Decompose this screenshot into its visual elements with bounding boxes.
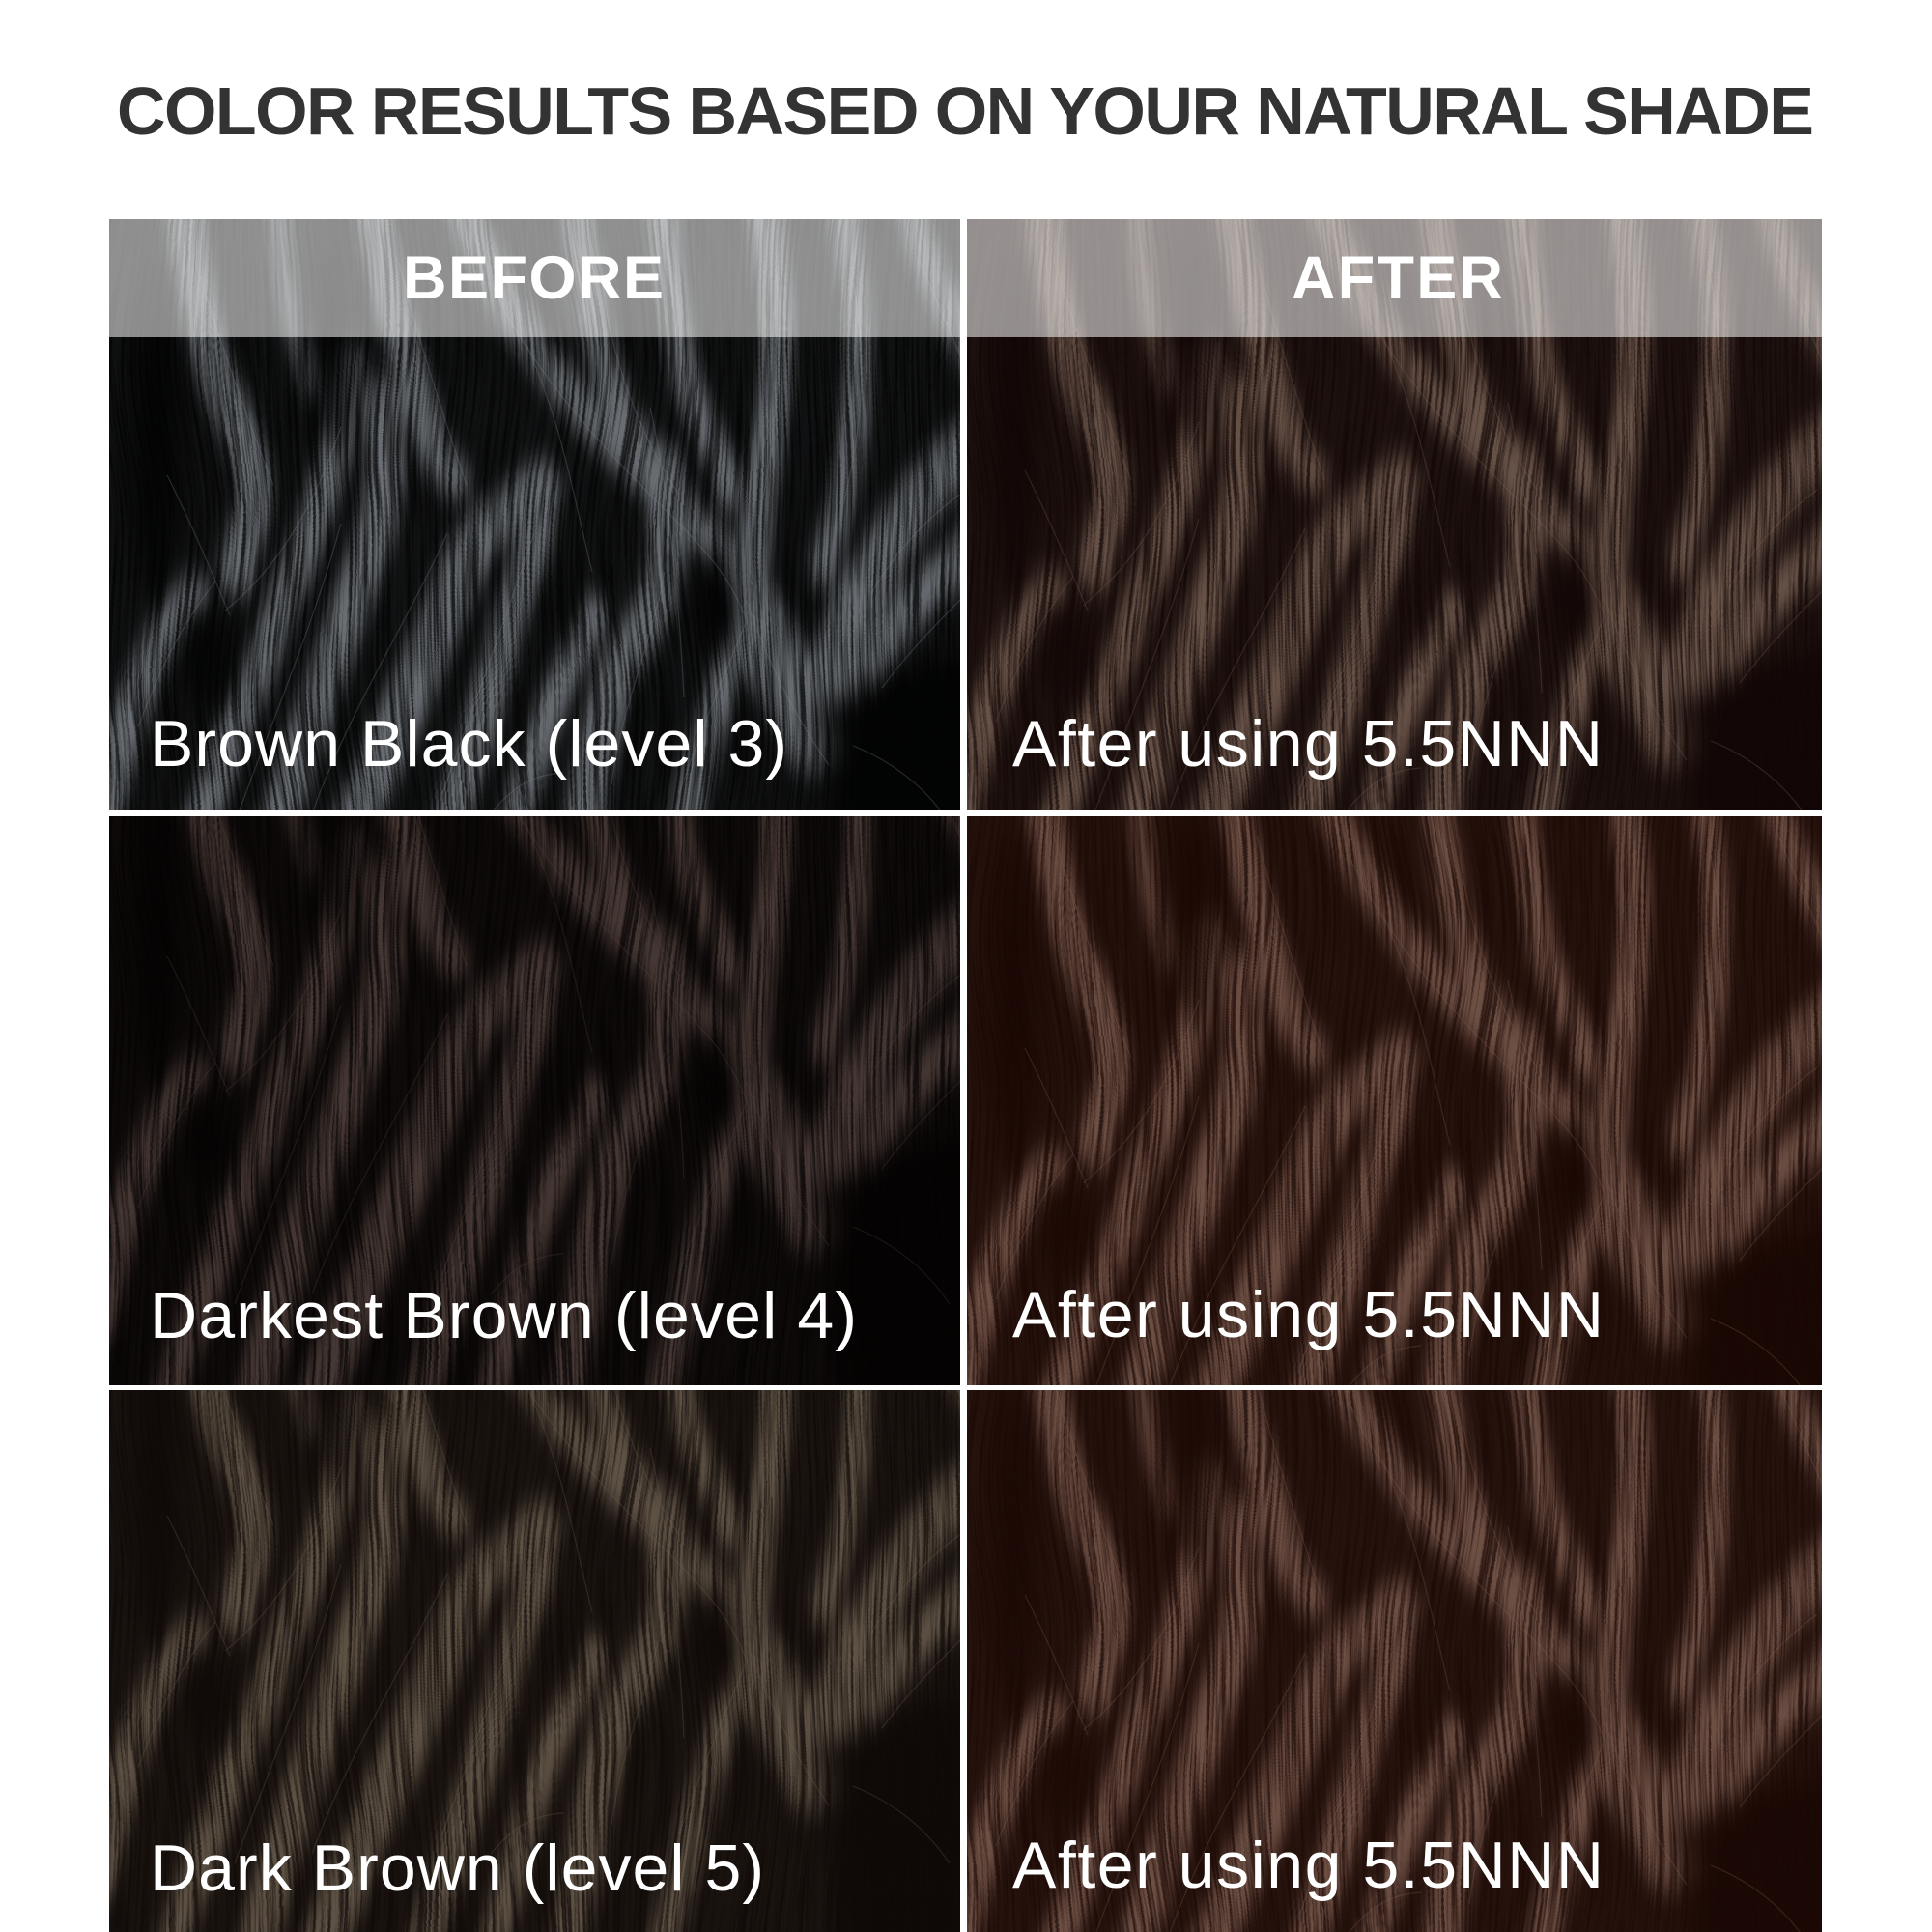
label: brown black: Brown Black (level 3) [150, 707, 787, 781]
label: after row 1: After using 5.5NNN [1012, 707, 1603, 781]
panel: darkest brown before [109, 816, 960, 1385]
label: dark brown: Dark Brown (level 5) [150, 1832, 764, 1905]
label: after row 2: After using 5.5NNN [1012, 1278, 1604, 1351]
label: darkest brown: Darkest Brown (level 4) [150, 1279, 857, 1352]
panel: brown black before [109, 219, 960, 810]
header band: after: AFTER [1292, 244, 1503, 312]
panel: brown black after [967, 219, 1822, 810]
header band: after [967, 219, 1822, 337]
panel: dark brown after [967, 1390, 1822, 1932]
header band: before: BEFORE [403, 244, 664, 312]
panel: dark brown before [109, 1390, 960, 1932]
label: after row 3: After using 5.5NNN [1012, 1829, 1604, 1902]
title: COLOR RESULTS BASED ON YOUR NATURAL SHADE [117, 73, 1814, 149]
header band: before [109, 219, 960, 337]
panel: darkest brown after [967, 816, 1822, 1385]
